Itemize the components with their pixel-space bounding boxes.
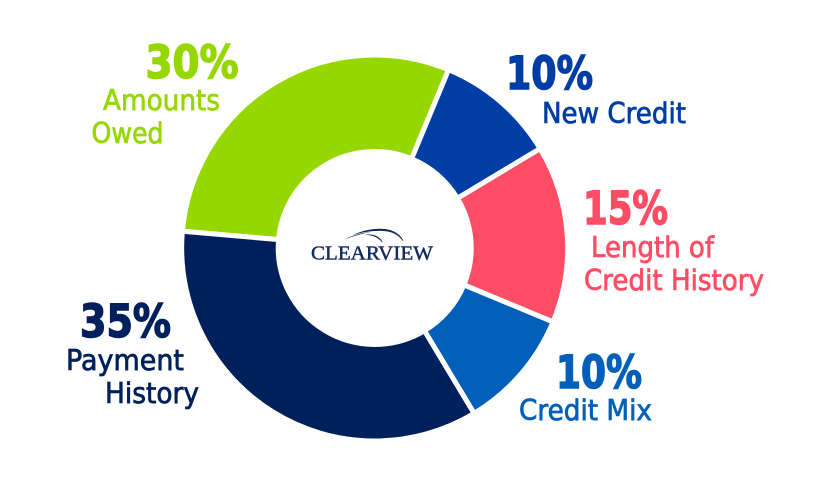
donut chart — [182, 55, 568, 441]
text: Owed: Owed — [92, 117, 164, 150]
label: length of credit history — [583, 182, 764, 297]
text: Length of: Length of — [591, 231, 715, 264]
text: Credit History: Credit History — [584, 264, 764, 297]
text: Credit Mix: Credit Mix — [519, 394, 652, 427]
slice: amounts owed 30% — [182, 55, 449, 240]
text: New Credit: New Credit — [542, 97, 686, 130]
slice: new credit 10% — [412, 70, 540, 198]
percent: 10%: 10% — [556, 346, 642, 399]
label: credit mix — [519, 346, 652, 427]
percent: 10%: 10% — [506, 47, 593, 100]
slice: length of credit history 15% — [457, 149, 568, 322]
label: new credit — [506, 47, 686, 130]
slice: credit mix 10% — [424, 285, 553, 413]
slice: payment history 35% — [182, 231, 474, 441]
percent: 35%: 35% — [80, 295, 171, 348]
logo: Clearview — [311, 229, 433, 264]
logo wordmark: CLEARVIEW — [311, 242, 433, 264]
percent: 15%: 15% — [583, 182, 668, 235]
label: payment history — [66, 295, 199, 410]
text: Payment: Payment — [66, 344, 184, 377]
label: amounts owed — [92, 36, 238, 150]
logo swoosh icon — [344, 229, 403, 242]
text: History: History — [105, 377, 199, 410]
text: Amounts: Amounts — [103, 84, 220, 117]
percent: 30%: 30% — [146, 36, 238, 89]
